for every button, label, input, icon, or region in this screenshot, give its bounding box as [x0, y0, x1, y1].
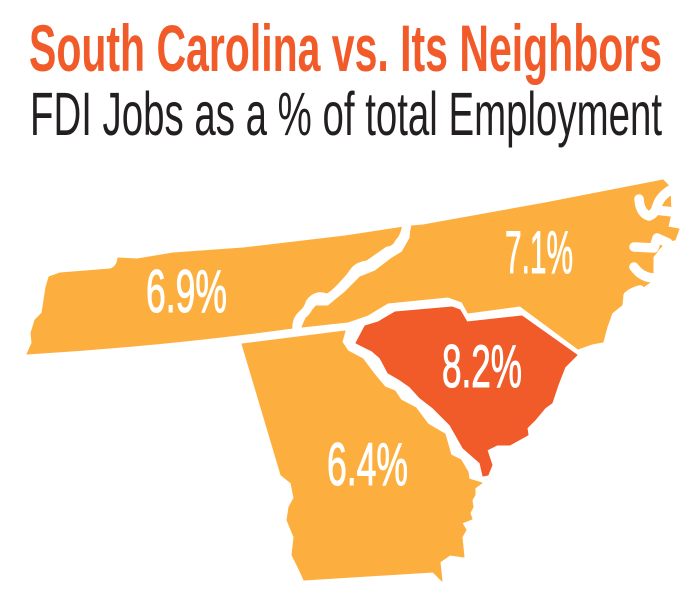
label: South Carolina 8.2%: 8.2%: [442, 333, 522, 400]
state: North Carolina: 7.1%: [505, 219, 573, 286]
label: Tennessee 6.9%: 6.9%: [146, 258, 227, 325]
state: South Carolina: [356, 307, 577, 476]
map of states: [27, 180, 679, 581]
state: Georgia: [242, 331, 482, 581]
state: North Carolina: [297, 180, 679, 349]
coastal sounds: [628, 189, 673, 296]
river border between Tennessee and North Carolina: [297, 222, 407, 329]
state: Tennessee: [27, 227, 404, 354]
label: Georgia 6.4%: 6.4%: [327, 431, 408, 498]
